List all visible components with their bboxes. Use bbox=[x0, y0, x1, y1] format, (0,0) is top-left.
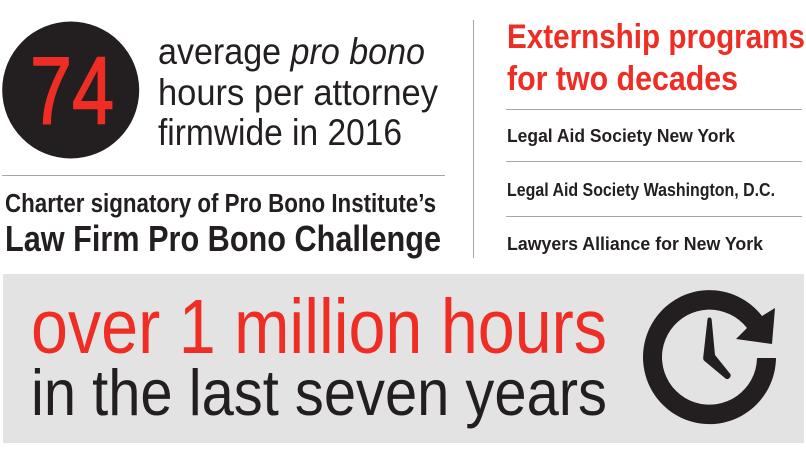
list: programs bbox=[507, 126, 775, 254]
list: programs: Legal Aid Society New York bbox=[507, 126, 736, 146]
text: over 1 million hours: over 1 million hours bbox=[31, 284, 607, 370]
list: programs: Lawyers Alliance for New York bbox=[507, 234, 764, 254]
icon: black circle with 74: 74 bbox=[30, 38, 114, 144]
panel: charter signatory: Law Firm Pro Bono Challenge bbox=[5, 218, 441, 259]
panel: over 1 million hours bbox=[3, 274, 804, 443]
text: average pro bono hours bbox=[158, 31, 438, 153]
list: programs: Legal Aid Society Washington, D.C. bbox=[507, 180, 775, 200]
text: average pro bono hours: hours per attorney bbox=[158, 72, 438, 113]
text: average pro bono hours: firmwide in 2016 bbox=[158, 112, 402, 153]
text: average pro bono hours: average pro bono bbox=[158, 31, 425, 72]
heading: externship programs: for two decades bbox=[507, 60, 738, 98]
panel: charter signatory: Charter signatory of Pro Bono Institute’s bbox=[5, 190, 436, 218]
panel: externship programs bbox=[506, 18, 805, 254]
heading: externship programs bbox=[507, 18, 805, 98]
panel: 74 average hours bbox=[2, 22, 438, 158]
icon: black circle with 74 bbox=[2, 22, 139, 158]
icon: clock with circular arrow bbox=[643, 290, 776, 424]
panel: charter signatory bbox=[5, 190, 441, 259]
text: in the last seven years: in the last seven years bbox=[31, 356, 607, 429]
